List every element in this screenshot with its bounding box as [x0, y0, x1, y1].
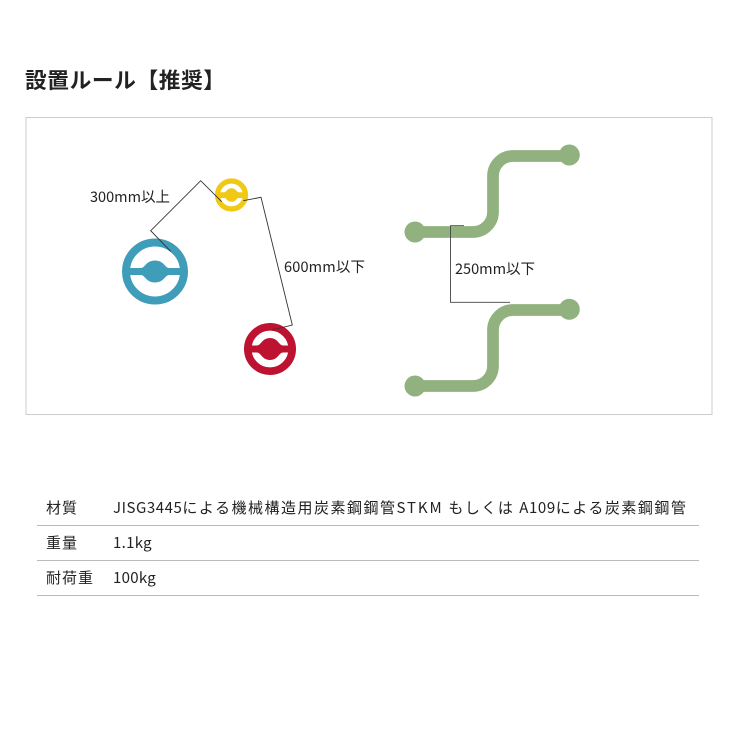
row: material [37, 490, 699, 526]
icon: lower green handrail [404, 299, 580, 396]
row: weight: 1.1kg [113, 532, 152, 553]
row: weight: 重量 [46, 532, 78, 553]
dimension line: 600mm [243, 197, 292, 330]
row: weight [37, 525, 699, 561]
label: 600mm以下: 600mm以下 [284, 256, 365, 277]
row: material: JISG3445による機械構造用炭素鋼鋼管STKM もしくは A109による炭素鋼鋼管 [113, 497, 687, 518]
dimension line: 300mm [151, 181, 222, 252]
row: load capacity [37, 560, 699, 596]
label: 250mm以下: 250mm以下 [455, 258, 535, 279]
row: material: 材質 [46, 497, 78, 518]
dimension line: 250mm [450, 226, 510, 302]
title: 設置ルール【推奨】 [25, 64, 226, 95]
icon: blue grip [126, 242, 184, 300]
icon: upper green handrail [404, 144, 580, 242]
row: load capacity: 100kg [113, 567, 156, 588]
icon: red grip [248, 327, 292, 371]
panel: placement diagram [26, 117, 712, 415]
label: 300mm以上: 300mm以上 [90, 186, 170, 207]
row: load capacity: 耐荷重 [46, 567, 94, 588]
icon: yellow grip [218, 181, 246, 209]
spec table [37, 497, 699, 596]
